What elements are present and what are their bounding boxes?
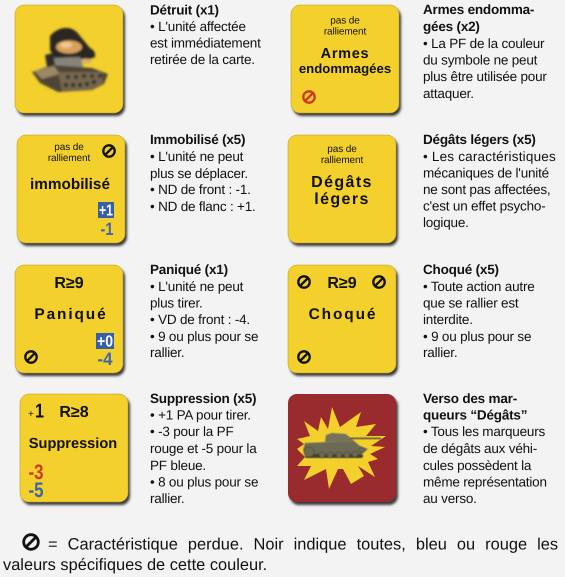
footnote: = Caractéristique perdue. Noir indique toutes, bleu ou rouge les [48,536,558,554]
text: Armes endommagées: du symbole ne peut [423,52,538,68]
text: Immobilisé: • ND de front : -1. [150,182,251,197]
marker: Paniqué [15,265,125,376]
text: Paniqué: • L'unité ne peut [150,279,244,294]
marker: Suppression [20,394,130,505]
marker: Armes endommagées: ralliement [324,26,366,38]
text: Choqué: Choqué (x5) [423,262,499,277]
text: Suppression: • +1 PA pour tirer. [150,408,251,422]
text: Paniqué: • 9 ou plus pour se [150,329,258,344]
text: Armes endommagées: • La PF de la couleur [423,36,545,51]
text: Choqué [423,262,535,360]
marker: Suppression: 1 [35,400,44,422]
text: Paniqué: Paniqué (x1) [150,262,228,277]
text: Dégâts légers: mécaniques de l'unité [423,166,549,180]
text: Immobilisé: • ND de flanc : +1. [150,199,256,214]
marker: Choqué: R≥9 [327,275,357,292]
text: Suppression [150,391,258,506]
marker: Détruit [15,5,125,116]
text: Dégâts légers [423,132,556,230]
marker: Armes endommagées: pas de [330,16,360,26]
marker: Armes endommagées: Armes [321,46,369,62]
text: Immobilisé [150,132,256,214]
text: Armes endommagées: gées (x2) [423,19,480,34]
text: Immobilisé: • L'unité ne peut [150,149,244,164]
value: -4: -4 [98,349,112,369]
text: Suppression: rouge et -5 pour la [150,441,257,456]
footnote: valeurs spécifiques de cette couleur. [3,556,267,574]
text: Détruit: est immédiatement [150,36,261,50]
text: Choqué: que se rallier est [423,296,519,310]
text: Paniqué: rallier. [150,345,184,360]
marker: Choqué [288,265,398,376]
marker: Dégâts légers: Dégâts [311,174,373,191]
text: Suppression: • -3 pour la PF [150,424,234,439]
text: Dégâts légers: logique. [423,215,469,230]
text: Choqué: rallier. [423,345,457,360]
text: Verso des marqueurs: Verso des mar- [423,391,517,406]
marker: Immobilisé: ralliement [48,153,90,164]
text: Paniqué: • VD de front : -4. [150,312,250,327]
marker: Dégâts légers: pas de [327,144,357,155]
icon: red prohibition [303,91,315,103]
footnote [3,535,558,574]
text: Immobilisé: plus se déplacer. [150,166,248,181]
icon: burning tank [32,28,108,92]
text: Dégâts légers: • Les caractéristiques [423,149,556,164]
marker: Paniqué: R≥9 [54,275,84,292]
text: Verso des marqueurs: de dégâts aux véhi- [423,441,537,456]
text: Armes endommagées: Armes endomma- [423,2,534,17]
text: Armes endommagées [423,2,547,101]
text: Immobilisé: Immobilisé (x5) [150,132,245,147]
text: Verso des marqueurs: au verso. [423,491,477,506]
marker: Verso des marqueurs [288,394,398,505]
text: Verso des marqueurs: cules possèdent la [423,458,532,473]
marker: Suppression: Suppression [29,436,117,452]
text: Suppression: PF bleue. [150,458,206,473]
text: Détruit: Détruit (x1) [150,2,219,18]
text: Détruit: retirée de la carte. [150,52,255,67]
text: Dégâts légers: c'est un effet psycho- [423,198,546,214]
marker: Suppression: + [28,409,34,420]
text: Armes endommagées: attaquer. [423,86,474,101]
text: Dégâts légers: Dégâts légers (x5) [423,132,536,147]
marker: Dégâts légers: légers [314,191,370,208]
text: Détruit: • L'unité affectée [150,19,246,34]
marker: Choqué: Choqué [309,306,377,323]
marker: Armes endommagées: endommagées [299,61,391,76]
value: -3 red: -3 [28,461,44,484]
text: Suppression: Suppression (x5) [150,391,256,406]
text: Verso des marqueurs [423,391,547,506]
text: Verso des marqueurs: queurs “Dégâts” [423,408,527,422]
text: Suppression: rallier. [150,491,184,506]
marker: Paniqué: Paniqué [34,306,108,323]
badge: +0: +0 [97,334,113,350]
icon: tank [303,433,381,458]
value: -5 blue: -5 [28,479,44,502]
marker: Suppression: R≥8 [59,404,89,421]
text: Dégâts légers: ne sont pas affectées, [423,182,550,197]
marker: Immobilisé: immobilisé [30,176,110,193]
value: -1: -1 [100,219,114,239]
text: Choqué: • 9 ou plus pour se [423,329,531,344]
text: Armes endommagées: plus être utilisée pour [423,69,547,84]
marker: Dégâts légers: ralliement [321,155,363,166]
icon: yellow burst [297,407,386,489]
marker: Armes endommagées [291,5,401,116]
text: Verso des marqueurs: • Tous les marqueurs [423,424,545,439]
text: Paniqué [150,262,258,360]
text: Paniqué: plus tirer. [150,296,203,310]
icon: prohibition [25,351,37,363]
text: Choqué: interdite. [423,312,473,327]
text: Détruit [150,2,261,67]
marker: Immobilisé [17,135,127,246]
text: Choqué: • Toute action autre [423,279,535,294]
icon: prohibition legend [24,535,38,549]
text: Suppression: • 8 ou plus pour se [150,474,258,490]
text: Verso des marqueurs: même représentation [423,474,547,490]
badge: +1: +1 [99,202,113,220]
marker: Immobilisé: pas de [54,142,84,153]
marker: Dégâts légers [288,135,398,246]
